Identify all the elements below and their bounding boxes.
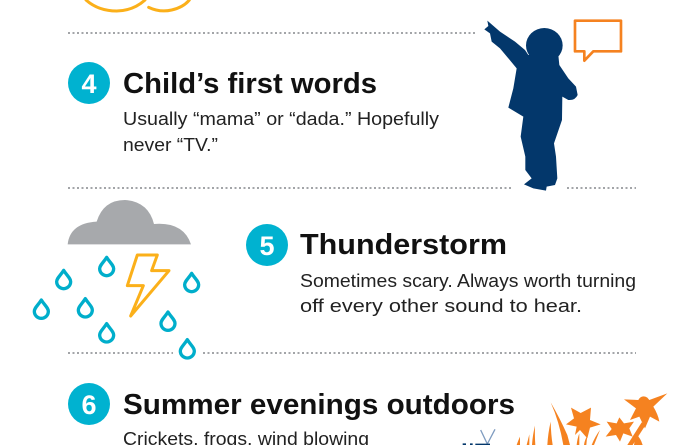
number badge 4: 4 [81,69,97,99]
text block: thunderstorm description [300,271,636,316]
text block: first words description: never “TV.” [123,135,218,155]
heading: Child's first words: Child’s first words [123,68,377,100]
lightning bolt [127,255,169,316]
icon: child silhouette pointing [484,21,578,191]
icon: orange flowers and grass [517,393,667,445]
flower left [566,408,601,438]
text block: first words description [123,109,439,155]
number badge 5: 5 [259,231,275,261]
raindrops [34,257,199,358]
number badge 4 [68,62,110,104]
cloud [68,200,191,244]
number badge 5 [246,224,288,266]
text block: thunderstorm description: Sometimes scary. Always worth turning [300,271,636,291]
heading: Summer evenings outdoors: Summer evenings outdoors [123,389,515,421]
icon: speech bubble [575,21,621,61]
icon: yellow rings cropped at top [86,0,189,11]
grass [551,402,570,445]
text block: thunderstorm description: off every other sound to hear. [300,295,582,316]
stems [627,422,646,445]
number badge 6 [68,383,110,425]
heading: Thunderstorm: Thunderstorm [300,229,507,261]
icon: storm cloud with rain and lightning [34,200,199,358]
flower middle [606,417,634,442]
flower right [624,393,667,428]
text block: first words description: Usually “mama” or “dada.” Hopefully [123,109,439,129]
icon: blue insect [463,429,495,445]
number badge 6: 6 [81,390,97,420]
